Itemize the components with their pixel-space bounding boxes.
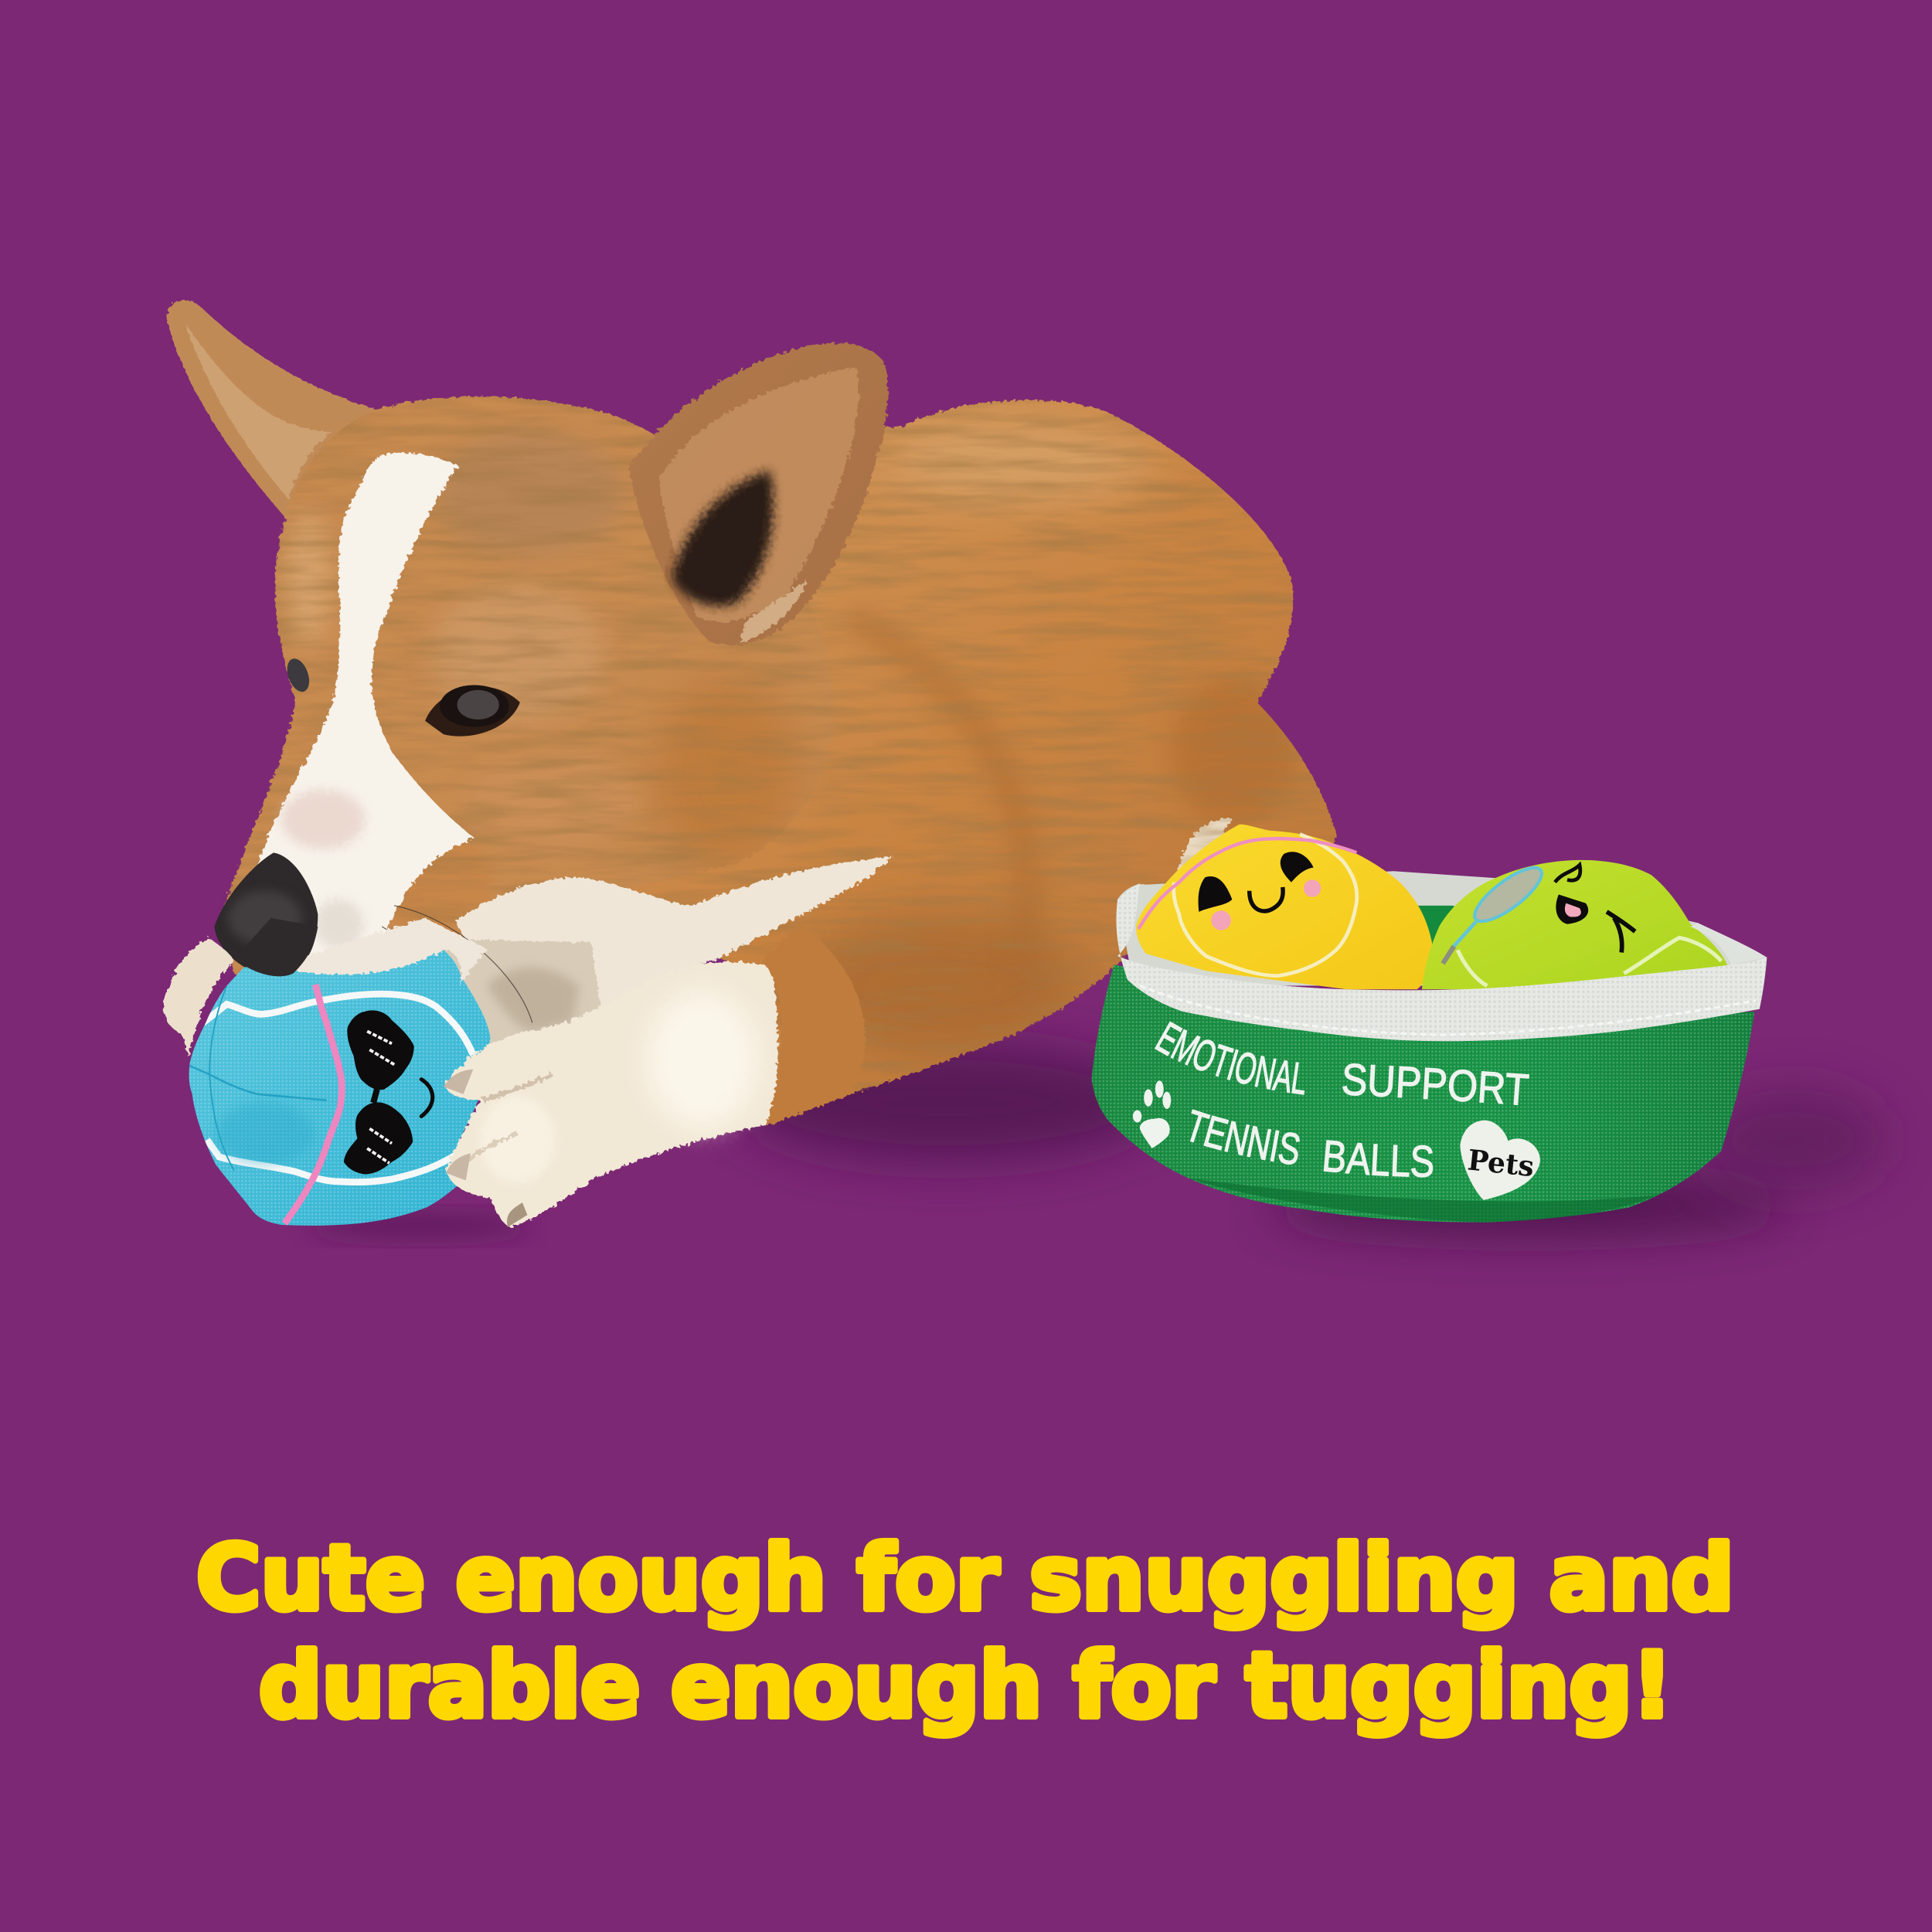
tennis racket: [1443, 859, 1549, 964]
infographic canvas: [162, 300, 1886, 1739]
floor shadows: [308, 1043, 1885, 1238]
pets heart logo: Pets: [1466, 1143, 1536, 1183]
under-chest fur between ball and paw: [437, 939, 604, 1060]
bowl bottom shade: [1188, 1178, 1657, 1223]
right ear: [628, 343, 888, 645]
yellow ball white line: [1174, 834, 1357, 976]
bowl embroidered text: emotional support tennis balls: TENNIS: [1190, 1109, 1300, 1165]
dog body: [629, 399, 1337, 1097]
bowl embroidered text: emotional support tennis balls: [1155, 1022, 1530, 1178]
bowl green body: [1092, 964, 1754, 1223]
ball fabric: [189, 950, 491, 1226]
bowl embroidered text: emotional support tennis balls: SUPPORT: [1342, 1063, 1530, 1105]
left paw behind ball: [164, 937, 234, 1057]
lime ball white line: [1458, 937, 1721, 986]
yellow ball cheeks: [1304, 879, 1321, 897]
toy: blue tennis ball: [185, 918, 866, 1232]
muzzle over ball: [293, 918, 487, 986]
white chest: [456, 856, 893, 1032]
sunglasses: [344, 1010, 414, 1174]
left ear: [166, 300, 388, 524]
white blaze and muzzle: [240, 453, 474, 980]
bowl inner dark: [1417, 906, 1454, 974]
pets heart logo: [1460, 1121, 1540, 1200]
headline: durable enough for tugging!: [259, 1634, 1672, 1738]
corgi dog: [148, 296, 1380, 1158]
ball seam: [190, 1066, 327, 1100]
bowl white rim band: [1117, 883, 1767, 1041]
bowl embroidered text: emotional support tennis balls: EMOTIONAL: [1155, 1022, 1304, 1095]
front paw: [446, 962, 778, 1227]
yellow ball smile: [1250, 887, 1283, 911]
bowl stitching: [1140, 986, 1756, 1035]
bowl rim right inner: [1691, 923, 1767, 964]
nose bottom overlap: [234, 918, 318, 976]
yellow ball: [1136, 825, 1432, 989]
dog head: [222, 396, 835, 978]
headline: Cute enough for snuggling and: [196, 1526, 1734, 1631]
eye: [283, 655, 520, 736]
headline: [196, 1526, 1734, 1738]
lime ball face: [1555, 865, 1580, 883]
toe nails: [444, 1070, 527, 1227]
pink seam line: [284, 985, 342, 1223]
bowl inner back rim: [1117, 871, 1767, 986]
bowl embroidered text: emotional support tennis balls: BALLS: [1323, 1140, 1433, 1178]
nose: [214, 852, 318, 977]
ball smile: [421, 1080, 433, 1117]
fur strands texture: [225, 396, 1335, 1092]
whiskers: [369, 906, 532, 1022]
toy bowl with tennis balls: [1091, 824, 1767, 1223]
dog, ball and bowl scene: [162, 300, 1886, 1257]
lime ball: [1422, 859, 1729, 989]
icon: paw print: [1133, 1080, 1171, 1148]
chest shadow: [487, 968, 579, 1032]
orange leg edge: [761, 924, 866, 1126]
yellow ball pink line: [1138, 838, 1356, 929]
yellow ball eyes: [1199, 876, 1232, 912]
ball stripes: [203, 994, 473, 1055]
